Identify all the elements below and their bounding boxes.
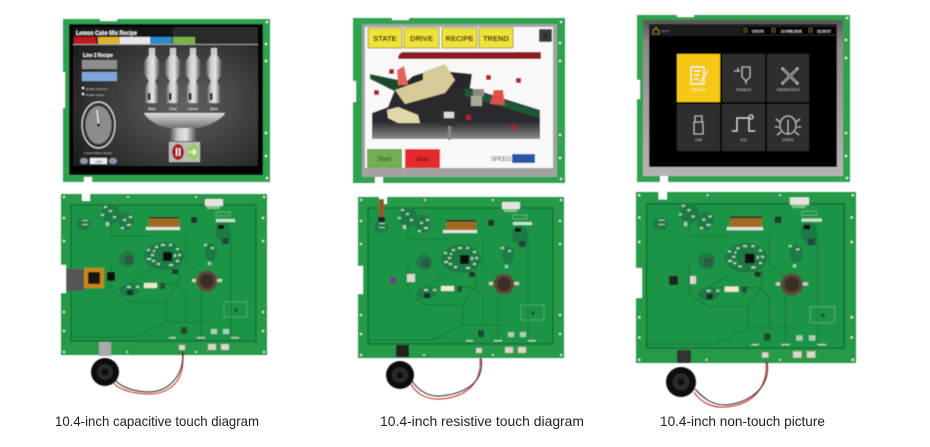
- recipe screen: Base: [148, 107, 156, 111]
- tile: usb: [677, 104, 720, 151]
- conveyor illustration: [370, 64, 540, 140]
- panel: non-touch: [636, 14, 856, 429]
- conveyor screen: SPEED: [491, 156, 511, 163]
- rear PCB with resistive connector: [358, 197, 564, 358]
- top view board with conveyor screen: [352, 17, 565, 184]
- menu screen: 000174: [752, 30, 764, 34]
- conveyor screen: Stop: [416, 156, 430, 163]
- tile: trabajo: [722, 54, 765, 102]
- recipe screen: 180: [95, 159, 103, 164]
- menu screen: [649, 24, 837, 167]
- menu buttons: RECIPE: [446, 34, 473, 43]
- menu buttons: DRIVE: [410, 34, 433, 43]
- panel: capacitive touch: [55, 17, 270, 429]
- recipe screen: [73, 27, 258, 166]
- panel: resistive touch: [352, 17, 584, 429]
- recipe screen: Lemon Cake Mix Recipe: [76, 30, 137, 37]
- tile: parametros: PARAMETROS: [777, 88, 800, 92]
- speaker: [666, 362, 767, 407]
- recipe screen: Spice: [210, 107, 218, 111]
- conveyor screen: [365, 27, 553, 168]
- conveyor screen: Start: [378, 156, 392, 163]
- conveyor screen: X: [543, 32, 549, 41]
- menu screen: 21 FEB 2018: [781, 30, 802, 34]
- rear PCB with capacitive touch board: [61, 194, 267, 356]
- resistive flex cable: [378, 199, 385, 222]
- tile: parametros: [767, 54, 809, 102]
- tile: ios: [722, 104, 765, 151]
- recipe screen: Lemon: [188, 107, 198, 111]
- speaker: [91, 352, 183, 394]
- tile: trabajo: TRABAJO: [736, 88, 752, 92]
- tile: ios: I/OS: [740, 138, 748, 142]
- tile: debug: DEBUG: [782, 138, 794, 142]
- touch controller flex: [66, 268, 115, 291]
- menu buttons: TREND: [483, 34, 509, 43]
- caption: 10.4-inch non-touch picture: [660, 413, 825, 429]
- speaker: [386, 358, 482, 399]
- caption: 10.4-inch resistive touch diagram: [380, 413, 584, 429]
- top view board with menu screen: [636, 14, 850, 183]
- menu buttons: [368, 28, 513, 48]
- recipe screen: Line 2 Recipe: [83, 53, 113, 59]
- menu buttons: STATE: [373, 34, 397, 43]
- tile: edicion: EDICION: [692, 88, 706, 92]
- menu screen: 11:20:07: [817, 30, 831, 34]
- recipe screen: Enable Scanner: [86, 87, 107, 91]
- tile: usb: USB: [695, 138, 703, 142]
- recipe screen: Enable Scale: [86, 93, 104, 97]
- tile: edicion: [677, 54, 720, 102]
- recipe screen: Current Mixer Speed: [84, 151, 112, 155]
- top view board with recipe screen: [62, 17, 270, 183]
- rear PCB non-touch: [636, 192, 856, 363]
- recipe screen: Choc: [169, 107, 177, 111]
- caption: 10.4-inch capacitive touch diagram: [55, 413, 259, 429]
- tile: debug: [767, 104, 809, 151]
- menu screen: MENU: [661, 29, 670, 33]
